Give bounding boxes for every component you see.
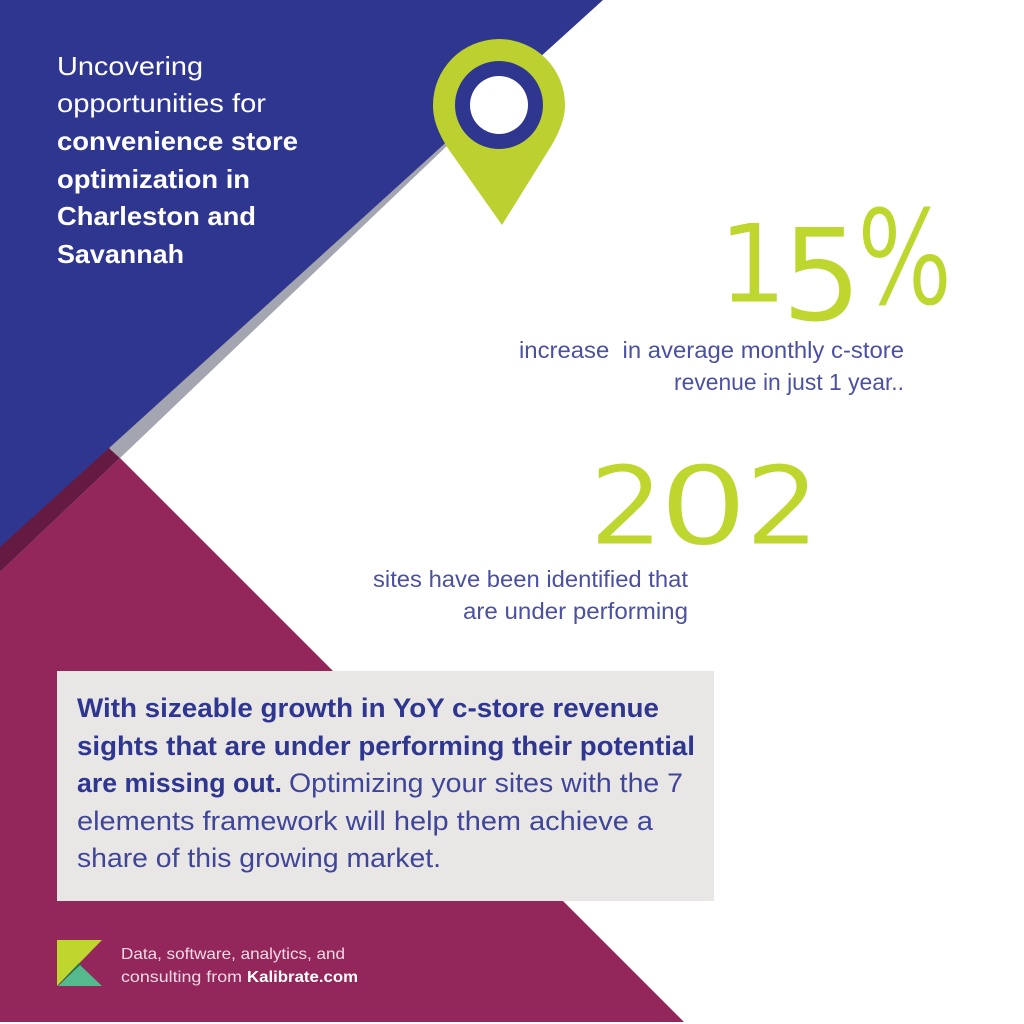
stat: 15% bbox=[718, 181, 952, 351]
stat: 202: 0 bbox=[659, 443, 748, 570]
stat text: revenue increase: increase in average monthly c-store bbox=[519, 337, 904, 363]
heading bbox=[57, 51, 298, 269]
dark shadow band bbox=[0, 440, 120, 572]
callout box: Optimizing your sites with the 7 bbox=[289, 768, 683, 798]
footer text: Data, software, analytics, and bbox=[121, 946, 345, 963]
panel: blue triangle bbox=[0, 0, 603, 547]
stat: 202: 2 bbox=[589, 443, 664, 570]
stat: 15%: % bbox=[857, 181, 952, 336]
footer text bbox=[121, 946, 358, 986]
stat text: under performing sites: are under performing bbox=[463, 598, 688, 624]
grey shadow band bbox=[105, 130, 450, 458]
heading: opportunities for bbox=[57, 88, 266, 118]
callout box: share of this growing market. bbox=[77, 843, 441, 873]
heading: Charleston and bbox=[57, 201, 256, 231]
stat text: under performing sites: sites have been identified that bbox=[373, 566, 689, 592]
callout box: sights that are under performing their potential bbox=[77, 731, 695, 761]
stat: 15%: 5 bbox=[781, 202, 862, 351]
callout box bbox=[57, 671, 714, 901]
icon: Kalibrate logo bbox=[57, 940, 102, 986]
heading: convenience store bbox=[57, 126, 298, 156]
stat text: revenue increase bbox=[519, 337, 904, 395]
heading: Savannah bbox=[57, 239, 184, 269]
panel: maroon triangle bbox=[0, 458, 684, 1022]
stat text: revenue increase: revenue in just 1 year.. bbox=[674, 369, 904, 395]
callout box: elements framework will help them achieve a bbox=[77, 806, 654, 836]
icon: location pin bbox=[433, 39, 565, 225]
stat: 15%: 1 bbox=[718, 201, 787, 328]
footer text: consulting from bbox=[121, 969, 242, 986]
stat: 202: 2 bbox=[745, 443, 820, 570]
callout box: are missing out. bbox=[77, 768, 282, 798]
footer text: Kalibrate.com bbox=[247, 969, 358, 986]
heading: Uncovering bbox=[57, 51, 203, 81]
stat: 202 bbox=[589, 443, 820, 570]
stat text: under performing sites bbox=[373, 566, 689, 624]
callout box: With sizeable growth in YoY c-store revenue bbox=[77, 693, 659, 723]
heading: optimization in bbox=[57, 164, 250, 194]
